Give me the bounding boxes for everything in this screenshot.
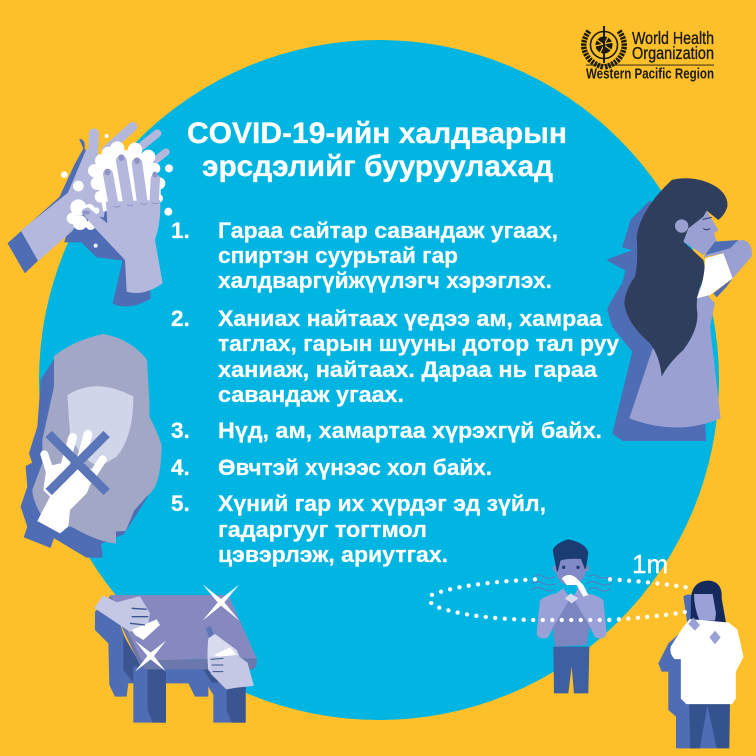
list item 1: спиртэн суурьтай гар xyxy=(218,243,458,268)
list item 1: Гараа сайтар савандаж угаах, xyxy=(218,218,558,243)
illustration: woman sneezing into elbow xyxy=(608,178,752,440)
list item 5: 5. xyxy=(171,491,190,516)
title: эрсдэлийг бууруулахад xyxy=(202,150,553,183)
illustration: washing hands with soap xyxy=(8,127,173,306)
list item 3: 3. xyxy=(171,418,190,443)
list item 3: Нүд, ам, хамартаа хүрэхгүй байх. xyxy=(218,418,602,443)
list item 2: таглах, гарын шууны дотор тал руу xyxy=(218,331,619,356)
hand xyxy=(37,434,103,533)
sparkle xyxy=(135,641,166,672)
list item 2: Ханиах найтаах үедээ ам, хамраа xyxy=(218,306,602,331)
logo text: World Health: World Health xyxy=(632,28,714,48)
illustration: cleaning a table xyxy=(95,584,257,723)
list item 1: халдваргүйжүүлэгч хэрэглэх. xyxy=(218,268,552,293)
list item 2 xyxy=(171,306,619,407)
1m label: 1m xyxy=(632,549,668,579)
sparkle xyxy=(203,584,239,621)
WHO logo xyxy=(584,26,714,82)
list item 4: 4. xyxy=(171,455,190,480)
illustration: do not touch your face xyxy=(22,335,161,557)
illustration: people keeping 1m distance xyxy=(429,540,743,748)
dotted distance ring xyxy=(429,579,687,620)
list item 2: савандаж угаах. xyxy=(218,382,404,407)
hand with sponge xyxy=(96,597,160,640)
list item 5: гадаргууг тогтмол xyxy=(218,517,427,542)
woman standing xyxy=(671,581,743,748)
list item 2: 2. xyxy=(171,306,190,331)
icon: WHO emblem xyxy=(584,26,624,67)
list item 5: Хүний гар их хүрдэг эд зүйл, xyxy=(218,491,546,516)
list item 2: ханиаж, найтаах. Дараа нь гараа xyxy=(218,357,598,382)
list item 5: цэвэрлэж, ариутгах. xyxy=(218,542,448,567)
hand with spray bottle xyxy=(206,626,253,688)
man coughing into tissue xyxy=(532,540,612,693)
list item 1: 1. xyxy=(171,218,190,243)
list item 4: Өвчтэй хүнээс хол байх. xyxy=(218,455,492,480)
title xyxy=(187,117,567,183)
list item 1 xyxy=(171,218,558,293)
person shadow xyxy=(658,594,717,748)
logo text: Western Pacific Region: Western Pacific Region xyxy=(586,66,714,82)
logo text: Organization: Organization xyxy=(632,43,714,63)
title: COVID-19-ийн халдварын xyxy=(187,117,567,150)
list item 5 xyxy=(171,491,546,567)
